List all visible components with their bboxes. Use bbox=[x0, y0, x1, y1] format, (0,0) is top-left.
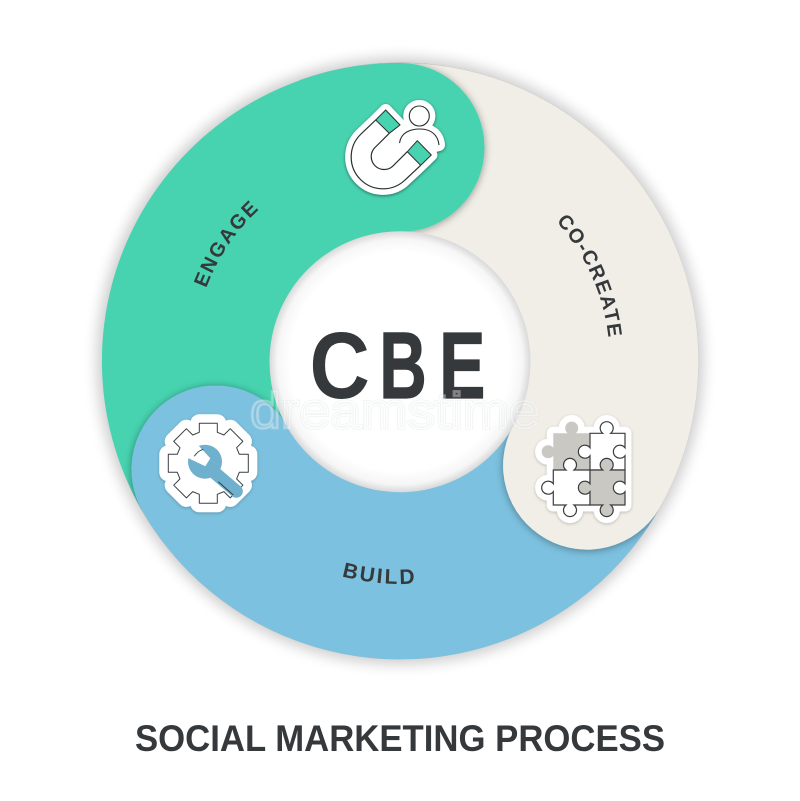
puzzle sticker backing bbox=[542, 422, 625, 517]
wrench detail line bbox=[218, 482, 233, 495]
magnet sticker backing bbox=[351, 106, 439, 189]
panel: build segment bbox=[131, 385, 659, 659]
watermark: dreamstime bbox=[250, 383, 540, 439]
wrench handle bbox=[208, 467, 236, 491]
infographic bbox=[91, 52, 709, 752]
person shoulders bbox=[400, 129, 439, 145]
outer soft shadow bbox=[97, 58, 703, 664]
icon: gear and wrench bbox=[168, 423, 248, 503]
puzzle piece top left bbox=[542, 422, 590, 470]
magnet pole bottom bbox=[407, 141, 431, 165]
person head bbox=[409, 106, 429, 126]
watermark: dreamstime bbox=[250, 383, 540, 439]
label: build: BUILD bbox=[343, 562, 414, 584]
magnet body outline bbox=[351, 120, 421, 189]
center label CBE: C bbox=[310, 312, 370, 418]
wrench head bbox=[188, 445, 222, 479]
panel: engage cap overlapping co-create bbox=[300, 62, 490, 234]
puzzle piece bottom right bbox=[578, 458, 625, 517]
center label CBE bbox=[310, 312, 485, 419]
icon: puzzle pieces bbox=[542, 422, 625, 517]
center label CBE: B bbox=[379, 313, 427, 419]
wrench jaw opening bbox=[184, 443, 210, 466]
center circle bbox=[270, 231, 530, 492]
panel: co-create segment bbox=[400, 63, 698, 550]
panel: engage segment bbox=[102, 63, 485, 512]
label: engage: ENGAGE bbox=[194, 200, 258, 287]
puzzle piece top right bbox=[578, 422, 625, 470]
title: SOCIAL MARKETING PROCESS bbox=[135, 718, 665, 759]
gear outline bbox=[168, 423, 248, 503]
icon: magnet attracting person bbox=[351, 106, 439, 189]
gear sticker backing bbox=[168, 423, 248, 503]
magnet pole top bbox=[376, 110, 400, 133]
gear inner arc bbox=[194, 449, 203, 456]
puzzle piece bottom left bbox=[542, 458, 590, 517]
center label CBE: E bbox=[439, 312, 485, 419]
label: co-create: CO-CREATE bbox=[559, 215, 622, 337]
